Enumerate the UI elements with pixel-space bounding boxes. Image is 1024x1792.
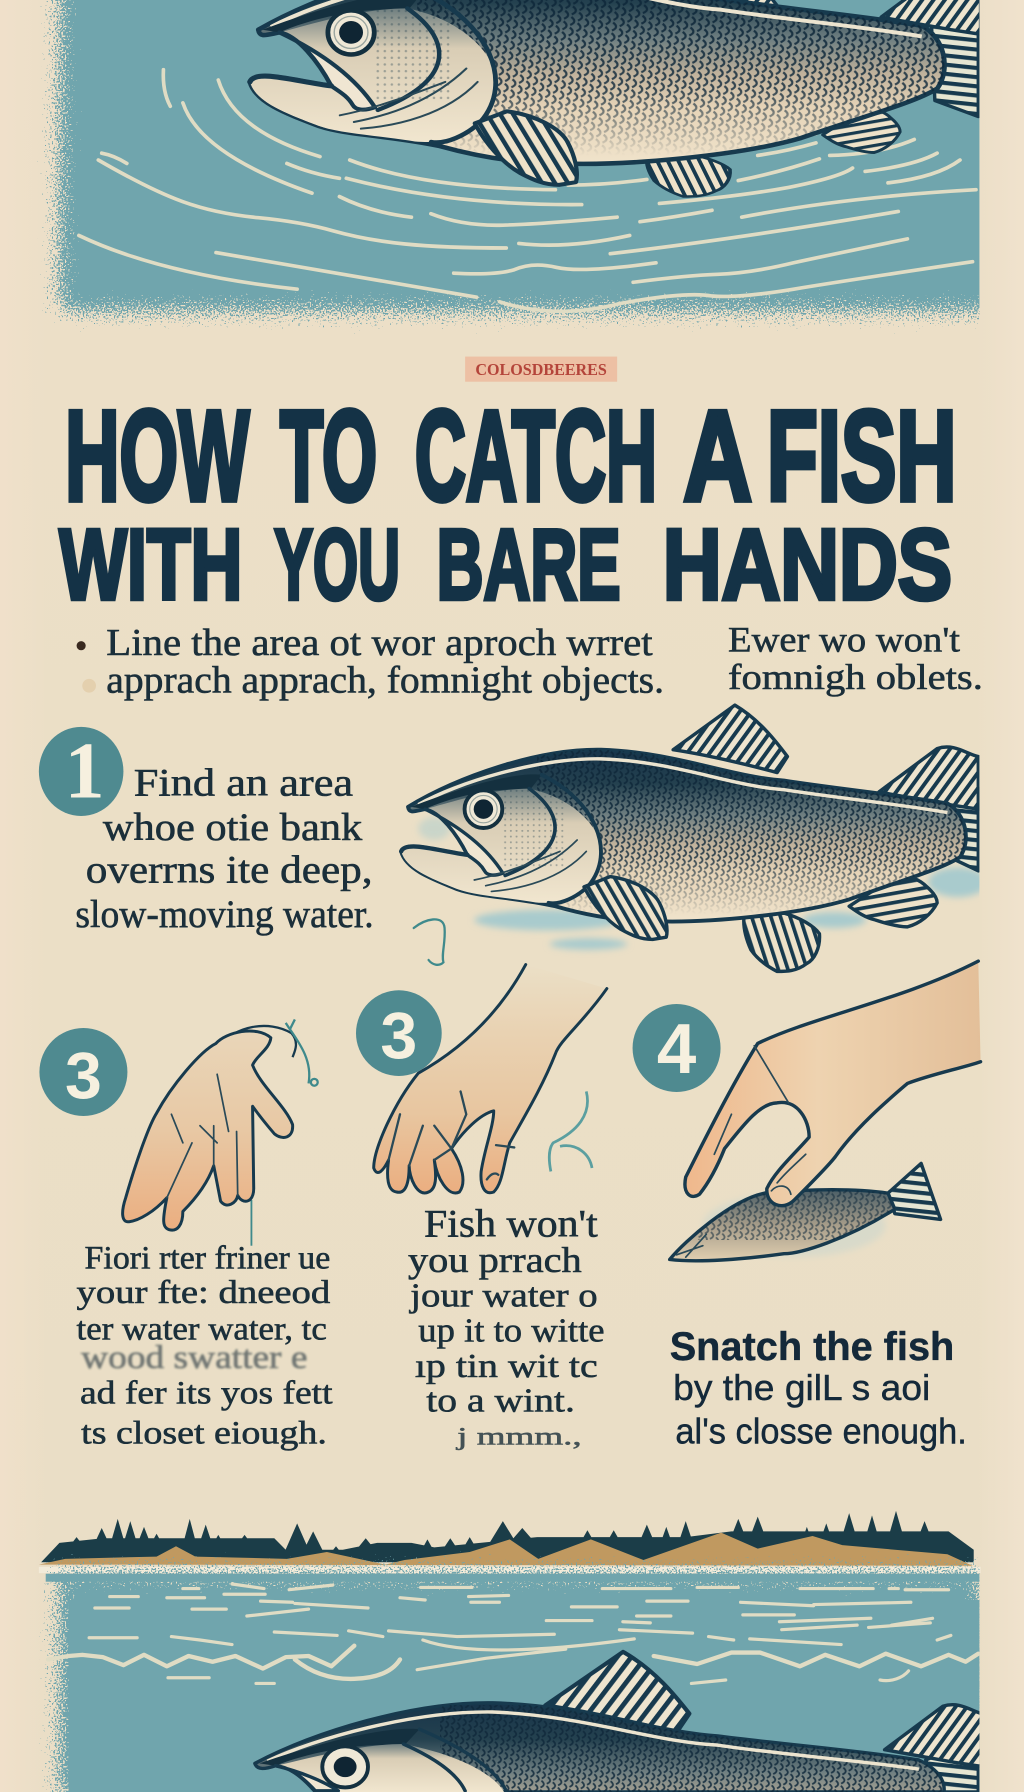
step 2 badge: 3 (65, 1039, 102, 1113)
text block: step 2 (77, 1240, 333, 1451)
step 3 badge: 3 (380, 999, 417, 1073)
ripple lines (79, 70, 976, 311)
illustration: shoreline (39, 1511, 981, 1573)
badge: small red label: COLOSDBEERES (475, 360, 607, 379)
title (59, 385, 957, 621)
step 1 badge (39, 727, 123, 816)
text block: intro left: apprach apprach, fomnight objects. (106, 660, 664, 702)
text block: intro right (728, 619, 983, 697)
text block: step 4 (670, 1325, 967, 1451)
text block: step 4: al's closse enough. (675, 1410, 967, 1451)
illustration: hand with line (123, 1019, 318, 1246)
text block: step 3: j mmm., (456, 1424, 582, 1451)
text block: step 3: ıp tin wit tc (415, 1347, 598, 1385)
text block: step 1: whoe otie bank (103, 806, 363, 849)
illustration: hand snatching (685, 961, 981, 1206)
text block: step 2: wood swatter e (81, 1339, 307, 1376)
title: BARE (437, 509, 621, 621)
step 2 badge (39, 1028, 127, 1116)
step 3 badge (356, 990, 442, 1076)
step 4 badge (633, 1004, 721, 1092)
title: HOW (65, 385, 249, 528)
title: WITH (59, 509, 242, 621)
step 1 badge: 1 (65, 728, 105, 816)
tree line (41, 1511, 974, 1562)
text block: step 3 (408, 1203, 605, 1451)
illustration: reaching hand (374, 965, 607, 1193)
title: A (683, 385, 752, 528)
panel: bottom water scene (46, 1574, 984, 1792)
text block: intro right: Ewer wo won't (728, 619, 960, 659)
water background (59, 0, 1003, 311)
text block: step 2: ts closet eiough. (81, 1414, 327, 1451)
badge: small red label (465, 357, 617, 382)
icon: teal hook squiggle (414, 919, 445, 965)
text block: step 2: ter water water, tc (77, 1310, 327, 1347)
panel: top water scene (59, 0, 1003, 311)
title: CATCH (415, 385, 657, 528)
text block: step 3: up it to witte (418, 1312, 605, 1350)
text block: step 3: you prrach (408, 1240, 582, 1280)
text block: intro left: Line the area ot wor aproch wrret (106, 622, 653, 664)
text block: step 3: jour water o (409, 1276, 598, 1314)
title: YOU (274, 509, 400, 621)
title: HANDS (663, 509, 952, 621)
title: TO (280, 385, 377, 528)
illustration: middle fish (401, 705, 987, 971)
sand hills (39, 1533, 973, 1566)
text block: step 1: overrns ite deep, (86, 848, 373, 891)
text block: step 4: Snatch the fish (670, 1325, 954, 1369)
text block: intro left (77, 622, 664, 702)
text block: step 4: by the gilL s aoi (673, 1367, 930, 1408)
water shadow (418, 817, 987, 950)
text block: step 1: Find an area (134, 761, 353, 804)
text block: step 2: ad fer its yos fett (80, 1374, 333, 1411)
zigzag wave (48, 1646, 978, 1679)
lake background (59, 1574, 979, 1792)
text block: step 1 (75, 761, 374, 936)
text block: step 3: Fish won't (424, 1203, 598, 1246)
text block: step 2: Fiori rter friner ue (85, 1240, 330, 1277)
lake ripples (89, 1584, 951, 1683)
text block: step 3: to a wint. (426, 1381, 575, 1419)
text block: step 2: your fte: dneeod (77, 1274, 331, 1311)
illustration: bottom fish (255, 1652, 984, 1792)
illustration: top fish (250, 0, 981, 197)
text block: intro right: fomnigh oblets. (728, 657, 983, 697)
illustration: small fish (670, 1163, 941, 1261)
text block: step 1: slow-moving water. (75, 893, 374, 936)
step 4 badge: 4 (657, 1010, 697, 1089)
shore line (39, 1567, 981, 1573)
